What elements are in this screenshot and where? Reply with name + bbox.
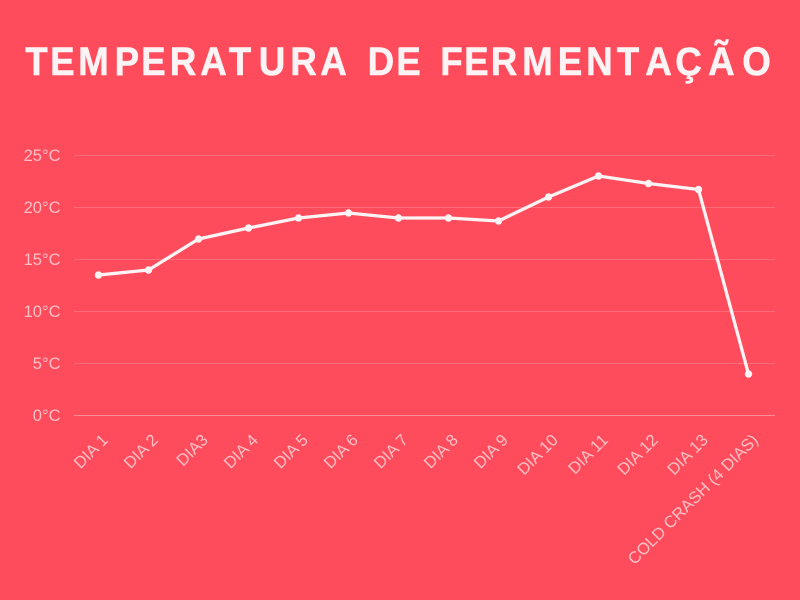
data points (95, 172, 752, 378)
x axis labels: DIA 7 (371, 431, 412, 472)
data line (98, 176, 748, 374)
x axis labels: DIA 2 (121, 431, 162, 472)
y axis labels (24, 147, 61, 425)
y axis labels: 15°C (24, 251, 61, 269)
y axis labels: 0°C (33, 407, 61, 425)
x axis labels (71, 431, 762, 568)
x axis labels: DIA 12 (614, 431, 662, 479)
title: TEMPERATURA DE FERMENTAÇÃO (25, 39, 771, 84)
y axis labels: 20°C (24, 199, 61, 217)
x axis labels: DIA 5 (271, 431, 312, 472)
x axis labels: DIA 13 (664, 431, 712, 479)
line chart: fermentation temperature (24, 147, 775, 568)
y axis labels: 10°C (24, 303, 61, 321)
x axis labels: DIA 4 (221, 431, 262, 472)
x axis labels: DIA 8 (421, 431, 462, 472)
x axis labels: DIA 10 (514, 431, 562, 479)
x axis labels: COLD CRASH (4 DIAS) (625, 431, 762, 568)
x axis labels: DIA 1 (71, 431, 112, 472)
x axis labels: DIA 6 (321, 431, 362, 472)
y axis labels: 25°C (24, 147, 61, 165)
y axis labels: 5°C (33, 355, 61, 373)
x axis labels: DIA 9 (471, 431, 512, 472)
x axis labels: DIA3 (173, 431, 212, 470)
x axis labels: DIA 11 (565, 431, 612, 478)
